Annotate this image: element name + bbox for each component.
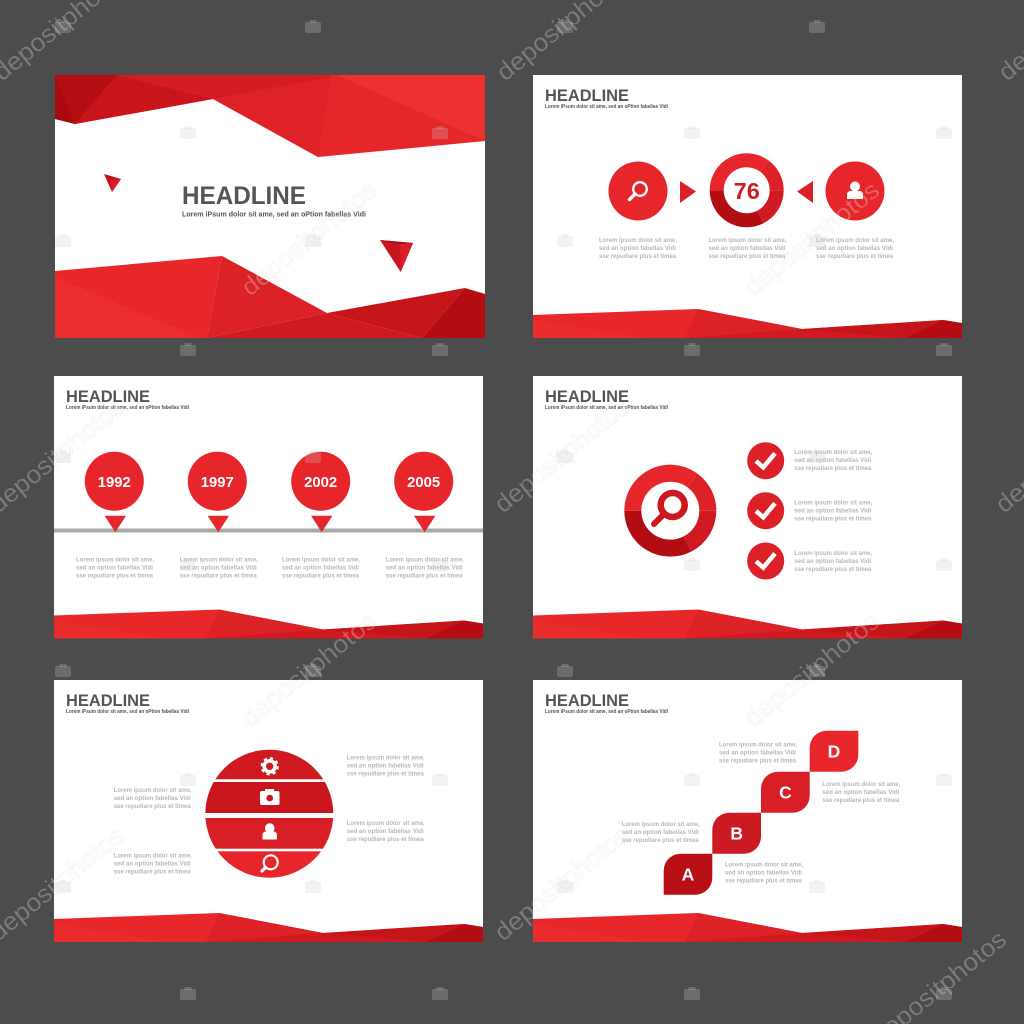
marker 1997: [188, 452, 247, 532]
marker 1992: 1992: [98, 475, 131, 491]
text block 1: sse repudiare plus et timea: [794, 465, 872, 472]
heading: HEADLINE: [545, 387, 629, 406]
arrow left: [797, 181, 813, 203]
text block 2: Lorem ipsum dolor sit ame,: [708, 237, 787, 244]
icon: search: [262, 855, 278, 871]
panel: timeline: [54, 376, 483, 638]
step A: A: [682, 864, 695, 884]
text block top right: [347, 755, 425, 778]
icon: gear: [262, 758, 278, 774]
text block 1: sse repudiare plus et timea: [599, 253, 676, 260]
marker 2005: [394, 452, 453, 532]
text block 1997: [180, 556, 258, 579]
text block 1997: sed an option fabellas Vidi: [180, 564, 257, 571]
text block top right: sed an option fabellas Vidi: [347, 763, 424, 770]
text block 2005: [386, 556, 464, 579]
text block D: sse repudiare plus et timea: [719, 757, 796, 764]
text block 1: sed an option fabellas Vidi: [599, 245, 676, 252]
text block 1: sed an option fabellas Vidi: [794, 457, 871, 464]
text block 3: [794, 550, 872, 573]
text block bottom right: Lorem ipsum dolor sit ame,: [347, 820, 425, 827]
text block 1997: sse repudiare plus et timea: [180, 572, 257, 579]
heading: [545, 86, 669, 110]
text block B: sed an option fabellas Vidi: [622, 829, 699, 836]
text block bottom right: sed an option fabellas Vidi: [347, 828, 424, 835]
watermarks: depositphotos: [739, 176, 885, 302]
text block bottom right: [347, 820, 425, 843]
text block top right: sse repudiare plus et timea: [347, 771, 424, 778]
heading: [66, 691, 190, 715]
bottom band: [54, 913, 483, 942]
text block A: sed an option fabellas Vidi: [725, 870, 802, 877]
text block 3: [816, 237, 894, 260]
text block 2: sse repudiare plus et timea: [708, 253, 786, 260]
text block B: Lorem ipsum dolor sit ame,: [622, 821, 700, 828]
panel: segmented circle: [54, 680, 483, 942]
text block A: sse repudiare plus et timea: [725, 878, 802, 885]
text block 2: [794, 500, 872, 522]
marker 2002: 2002: [304, 475, 337, 491]
text block top right: Lorem ipsum dolor sit ame,: [347, 755, 425, 762]
text block 3: sse repudiare plus et timea: [794, 566, 872, 573]
heading: [545, 691, 669, 715]
text block bottom left: sse repudiare plus et timea: [114, 868, 191, 875]
text block 1: Lorem ipsum dolor sit ame,: [599, 237, 677, 244]
text block 2: [708, 237, 787, 260]
text block 3: sed an option fabellas Vidi: [794, 558, 871, 565]
text block 3: Lorem ipsum dolor sit ame,: [794, 550, 872, 557]
text block C: sse repudiare plus et timea: [822, 797, 900, 804]
icon: person circle: [826, 162, 884, 220]
heading: HEADLINE: [545, 86, 629, 105]
icon: large triangle: [380, 240, 413, 272]
donut score 76: 76: [734, 178, 760, 204]
step D: D: [828, 742, 840, 762]
text block D: Lorem ipsum dolor sit ame,: [719, 741, 797, 748]
heading: HEADLINE: [66, 691, 150, 710]
icon: person: [262, 823, 277, 840]
text block D: [719, 741, 797, 764]
text block A: Lorem ipsum dolor sit ame,: [725, 862, 803, 869]
marker 1992: [85, 452, 144, 532]
text block 3: sed an option fabellas Vidi: [816, 245, 893, 252]
text block 2005: Lorem ipsum dolor sit ame,: [386, 556, 464, 563]
watermarks: depositphotos: [236, 607, 382, 733]
step B: [712, 813, 761, 854]
text block 1992: sse repudiare plus et timea: [76, 572, 153, 579]
text block bottom left: [114, 852, 192, 875]
heading: Lorem iPsum dolor sit ame, sed an oPtion fabellas Vidi: [545, 405, 669, 411]
text block B: sse repudiare plus et timea: [622, 837, 699, 844]
heading: Lorem iPsum dolor sit ame, sed an oPtion fabellas Vidi: [545, 709, 669, 715]
step D: [810, 731, 858, 772]
icon: camera: [260, 789, 280, 805]
panel: cover slide: [55, 75, 485, 338]
text block 1: [794, 449, 872, 472]
text block 2: sed an option fabellas Vidi: [708, 245, 786, 252]
bottom band: [54, 610, 483, 638]
bottom polygon band: [55, 256, 485, 338]
text block A: [725, 862, 803, 885]
text block D: sed an option fabellas Vidi: [719, 749, 796, 756]
donut score 76: [717, 160, 777, 220]
text block 2002: Lorem ipsum dolor sit ame,: [282, 556, 360, 563]
text block C: sed an option fabellas Vidi: [822, 789, 899, 796]
text block 2: sse repudiare plus et timea: [794, 516, 872, 522]
icon: small triangle: [104, 174, 121, 192]
text block 2002: sed an option fabellas Vidi: [282, 564, 359, 571]
bottom band: [533, 913, 962, 942]
timeline axis: [54, 528, 483, 532]
marker 2005: 2005: [407, 475, 440, 491]
text block top left: sse repudiare plus et timea: [114, 803, 191, 810]
arrow right: [680, 181, 696, 203]
text block bottom left: Lorem ipsum dolor sit ame,: [114, 852, 192, 859]
step C: [761, 772, 810, 813]
step B: B: [730, 824, 743, 844]
heading: [66, 387, 190, 411]
step A: [664, 854, 712, 895]
text block C: [822, 781, 900, 804]
text block 2002: sse repudiare plus et timea: [282, 572, 359, 579]
panel: process with score: [533, 75, 962, 338]
text block top left: Lorem ipsum dolor sit ame,: [114, 787, 192, 794]
text block top left: [114, 787, 192, 810]
text block B: [622, 821, 700, 844]
watermarks: depositphotos: [236, 176, 382, 302]
text block bottom right: sse repudiare plus et timea: [347, 836, 424, 843]
title: HEADLINE: [182, 182, 306, 210]
text block 1: Lorem ipsum dolor sit ame,: [794, 449, 872, 456]
heading: HEADLINE: [545, 691, 629, 710]
text block 2005: sed an option fabellas Vidi: [386, 564, 463, 571]
text block 2: sed an option fabellas Vidi: [794, 508, 871, 514]
heading: Lorem iPsum dolor sit ame, sed an oPtion fabellas Vidi: [66, 405, 190, 411]
text block 3: Lorem ipsum dolor sit ame,: [816, 237, 894, 244]
text block 2: Lorem ipsum dolor sit ame,: [794, 500, 872, 506]
text block 3: sse repudiare plus et timea: [816, 253, 893, 260]
step C: C: [779, 782, 792, 802]
check icon 1: [747, 442, 784, 479]
panel: staircase steps: [533, 680, 962, 942]
text block 2002: [282, 556, 360, 579]
top polygon band: [55, 75, 485, 157]
watermarks: depositphotos: [739, 607, 885, 733]
check icon 3: [747, 542, 784, 580]
text block 1992: Lorem ipsum dolor sit ame,: [76, 556, 154, 563]
check icon 2: [747, 492, 784, 529]
marker 1997: 1997: [201, 475, 234, 491]
subtitle: Lorem iPsum dolor sit ame, sed an oPtion fabellas Vidi: [182, 210, 366, 218]
text block bottom left: sed an option fabellas Vidi: [114, 860, 191, 867]
text block 1992: sed an option fabellas Vidi: [76, 564, 153, 571]
text block 2005: sse repudiare plus et timea: [386, 572, 463, 579]
heading: HEADLINE: [66, 387, 150, 406]
heading: Lorem iPsum dolor sit ame, sed an oPtion fabellas Vidi: [545, 104, 669, 110]
watermarks: depositphotos: [489, 393, 635, 519]
heading: Lorem iPsum dolor sit ame, sed an oPtion fabellas Vidi: [66, 709, 190, 715]
donut with magnifier: [633, 473, 708, 548]
text block 1992: [76, 556, 154, 579]
text block C: Lorem ipsum dolor sit ame,: [822, 781, 900, 788]
text block 1: [599, 237, 677, 260]
heading: [545, 387, 669, 411]
icon: search circle: [608, 162, 668, 220]
bottom band: [533, 610, 962, 638]
watermarks: depositphotos: [489, 821, 635, 947]
panel: checklist: [533, 376, 962, 638]
text block 1997: Lorem ipsum dolor sit ame,: [180, 556, 258, 563]
segmented circle: [205, 749, 335, 879]
marker 2002: [291, 452, 350, 532]
bottom band: [533, 309, 962, 338]
text block top left: sed an option fabellas Vidi: [114, 795, 191, 802]
